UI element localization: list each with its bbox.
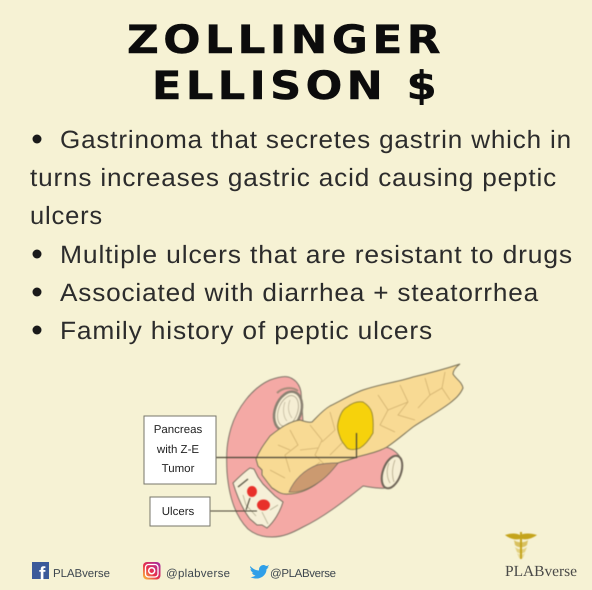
social: twitter bbox=[250, 565, 336, 580]
logo: caduceus: PLABverse bbox=[505, 563, 577, 580]
logo: caduceus bbox=[505, 532, 577, 580]
bullet list: Associated with diarrhea + steatorrhea bbox=[60, 279, 539, 307]
label: pancreas with Z-E tumor bbox=[144, 416, 216, 484]
social: instagram: @plabverse bbox=[166, 568, 230, 580]
brown underside of pancreas bbox=[289, 463, 338, 492]
leader line: tumor bbox=[216, 433, 356, 458]
bullet list bbox=[30, 126, 573, 345]
label: ulcers: Ulcers bbox=[162, 506, 195, 518]
bullet list: Gastrinoma that secretes gastrin which in bbox=[60, 126, 572, 154]
label: pancreas with Z-E tumor: Tumor bbox=[162, 463, 195, 475]
pancreas lobule lines bbox=[270, 372, 450, 478]
ulcer spot upper bbox=[247, 486, 257, 497]
title: ZOLLINGER bbox=[127, 18, 445, 63]
social: facebook: f bbox=[39, 564, 46, 585]
ulcer panel bbox=[233, 468, 283, 528]
social: twitter: @PLABverse bbox=[270, 568, 336, 580]
duodenum top opening bbox=[269, 388, 307, 434]
title: ELLISON $ bbox=[152, 64, 441, 109]
duodenum bbox=[227, 377, 400, 537]
social: facebook bbox=[32, 562, 110, 585]
title bbox=[127, 18, 445, 109]
bullet list: ulcers bbox=[30, 202, 103, 230]
social: facebook: PLABverse bbox=[53, 568, 110, 580]
diagram: pancreas and duodenum bbox=[210, 364, 463, 537]
ulcer spot lower bbox=[257, 500, 270, 510]
social: instagram bbox=[143, 562, 230, 580]
label: pancreas with Z-E tumor: Pancreas bbox=[154, 424, 203, 436]
bullet list: turns increases gastric acid causing peptic bbox=[30, 164, 557, 192]
bullet list: Multiple ulcers that are resistant to drugs bbox=[60, 241, 573, 269]
duodenum right opening bbox=[378, 453, 406, 491]
tumor bbox=[338, 402, 373, 450]
label: ulcers bbox=[150, 497, 210, 526]
pancreas body bbox=[256, 364, 463, 494]
leader line: ulcers bbox=[210, 498, 257, 511]
bullet list: Family history of peptic ulcers bbox=[60, 317, 433, 345]
label: pancreas with Z-E tumor: with Z-E bbox=[156, 444, 199, 456]
